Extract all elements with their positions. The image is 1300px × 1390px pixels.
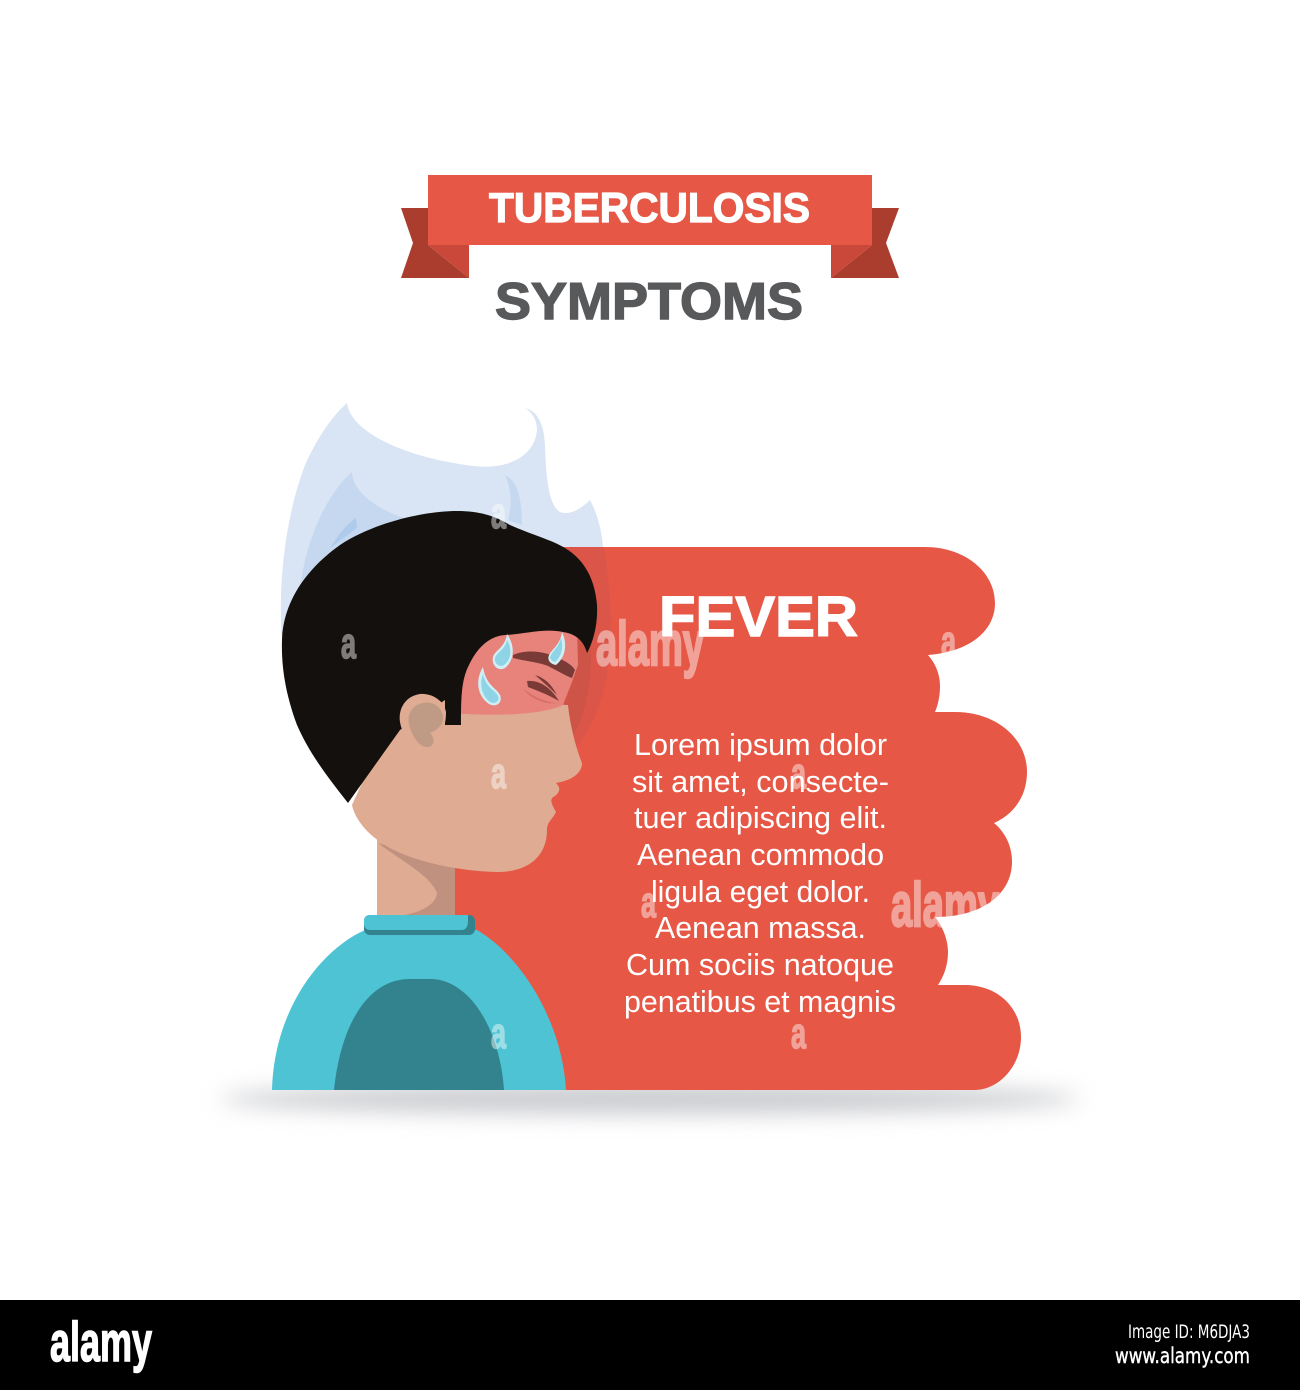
image id: Image ID: M6DJA3 [1128, 1321, 1250, 1343]
footer logo: alamy [50, 1310, 152, 1373]
body text [624, 728, 896, 1019]
body text: penatibus et magnis [624, 985, 896, 1019]
watermarks: alamy [596, 610, 704, 679]
flame middle [300, 472, 410, 600]
watermarks: a [791, 1009, 806, 1058]
body text: Lorem ipsum dolor [634, 728, 887, 762]
watermarks: alamy [891, 871, 999, 940]
watermarks: a [341, 619, 356, 668]
watermarks: a [941, 617, 956, 666]
title ribbon [401, 175, 899, 278]
face [352, 700, 582, 872]
watermarks: a [641, 878, 656, 927]
body text: Cum sociis natoque [626, 948, 894, 982]
body text: Aenean commodo [637, 838, 884, 872]
red text panel [450, 547, 1027, 1090]
neck [377, 835, 455, 915]
watermarks: a [491, 749, 506, 798]
right ribbon tail [831, 208, 899, 278]
neck shadow [378, 843, 455, 915]
right ribbon fold [831, 245, 872, 278]
fever flame [281, 403, 603, 640]
fever heading: FEVER [659, 585, 858, 649]
eyebrow [513, 651, 575, 678]
flame small right [505, 475, 522, 525]
watermarks: a [491, 489, 506, 538]
flame outer [281, 403, 603, 640]
watermarks: a [491, 1009, 506, 1058]
hair [282, 511, 597, 803]
watermarks: a [791, 749, 806, 798]
ribbon band [428, 175, 872, 245]
watermarks [341, 489, 999, 1058]
footer bar [0, 1300, 1300, 1390]
heading: symptoms: SYMPTOMS [495, 273, 803, 331]
website: www.alamy.com [1115, 1344, 1250, 1368]
fever glow on panel [540, 547, 611, 760]
forehead flush [450, 625, 578, 715]
man profile [272, 511, 597, 1090]
sweat drops [478, 632, 565, 705]
body text: sit amet, consecte- [632, 765, 889, 799]
body text: Aenean massa. [655, 911, 866, 945]
ground shadow [220, 1084, 1080, 1114]
body text: ligula eget dolor. [651, 875, 870, 909]
title: tuberculosis: TUBERCULOSIS [489, 184, 810, 231]
body text: tuer adipiscing elit. [634, 801, 887, 835]
flame inner [330, 518, 357, 548]
shirt inner patch [334, 979, 504, 1090]
left ribbon tail [401, 208, 469, 278]
shirt [272, 930, 566, 1090]
closed eye [523, 675, 559, 703]
ear [400, 694, 446, 749]
collar [364, 915, 475, 935]
left ribbon fold [428, 245, 469, 278]
